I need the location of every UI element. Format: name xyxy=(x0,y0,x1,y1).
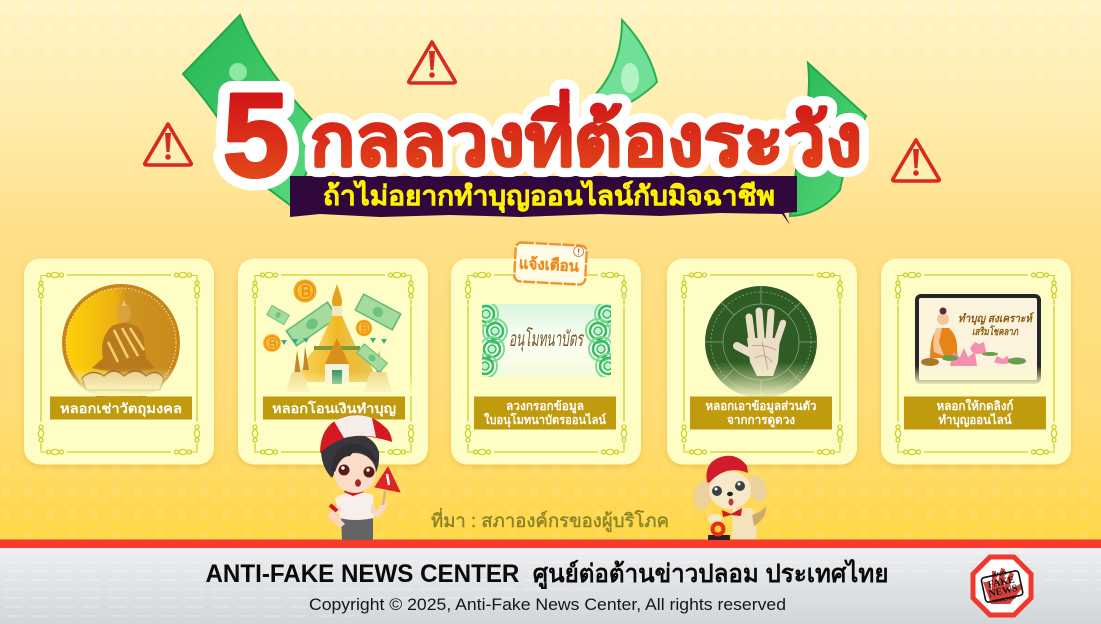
warning icon right xyxy=(893,140,939,181)
logo: anti-fake news stop sign xyxy=(973,557,1031,615)
illustration: tablet with donation page xyxy=(915,294,1041,386)
red footer stripe xyxy=(0,540,1101,548)
footer wave texture xyxy=(0,548,1101,624)
panel: card 2 donation transfer xyxy=(238,258,428,464)
title: 5 xyxy=(223,70,289,202)
label xyxy=(904,396,1046,430)
label xyxy=(50,396,192,420)
money illustration xyxy=(183,15,866,216)
mascot: dog with siren xyxy=(691,456,771,540)
label: ลวงกรอกข้อมูล xyxy=(506,399,584,414)
logo: anti-fake news stop sign: FAKE xyxy=(987,574,1016,591)
footer heading: ANTI-FAKE NEWS CENTER ศูนย์ต่อต้านข่าวปลอม ประเทศไทย xyxy=(206,558,888,590)
title: กลลวงที่ต้องระวัง xyxy=(310,89,862,181)
mascot: boy with warning sign xyxy=(320,415,400,540)
alert tag: แจ้งเตือน xyxy=(518,254,580,276)
label: หลอกเช่าวัตถุมงคล xyxy=(60,401,182,417)
subtitle banner: ถ้าไม่อยากทำบุญออนไลน์กับมิจฉาชีพ xyxy=(323,180,775,213)
logo: anti-fake news stop sign: THAILAND xyxy=(993,594,1017,604)
illustration: tablet with donation page: เสริมโชคลาภ xyxy=(972,325,1019,338)
logo: anti-fake news stop sign: ANTI xyxy=(992,571,1008,580)
label: หลอกโอนเงินทำบุญ xyxy=(272,400,396,417)
title xyxy=(223,70,862,202)
illustration: certificate: อนุโมทนาบัตร xyxy=(509,327,585,352)
label: หลอกให้กดลิงก์ xyxy=(936,398,1014,413)
panel: card 1 amulet rental xyxy=(24,258,214,464)
title: 5 xyxy=(223,70,289,202)
footer background xyxy=(0,548,1101,624)
illustration: tablet with donation page: ทำบุญ สงเคราะห์ xyxy=(958,312,1035,326)
warning icon top xyxy=(409,42,455,83)
copyright: Copyright © 2025, Anti-Fake News Center, All rights reserved xyxy=(309,596,786,614)
alert tag xyxy=(514,242,587,285)
panel: card 3 anumodana card xyxy=(451,258,641,464)
subtitle banner xyxy=(290,176,797,225)
illustration: pagoda and coins xyxy=(262,280,412,396)
label: ใบอนุโมทนาบัตรออนไลน์ xyxy=(484,412,607,428)
background pixel pattern top xyxy=(2,3,1088,57)
panel: card 5 donation link xyxy=(881,258,1071,464)
label: จากการดูดวง xyxy=(727,413,795,428)
label xyxy=(474,396,616,430)
label: หลอกเอาข้อมูลส่วนตัว xyxy=(706,399,817,414)
panel: card 4 palm reading xyxy=(667,258,857,464)
illustration: palm on zodiac wheel xyxy=(700,286,822,400)
title: กลลวงที่ต้องระวัง xyxy=(310,89,862,181)
logo: anti-fake news stop sign: NEWS xyxy=(988,583,1019,600)
background pixel pattern bottom xyxy=(0,465,1101,540)
label xyxy=(690,396,832,430)
warning icon left xyxy=(145,124,191,165)
label xyxy=(263,396,405,420)
icon: gold Buddha coin xyxy=(55,284,190,402)
illustration: certificate xyxy=(473,302,620,378)
source text: ที่มา : สภาองค์กรของผู้บริโภค xyxy=(431,508,669,532)
label: ทำบุญออนไลน์ xyxy=(938,412,1012,428)
